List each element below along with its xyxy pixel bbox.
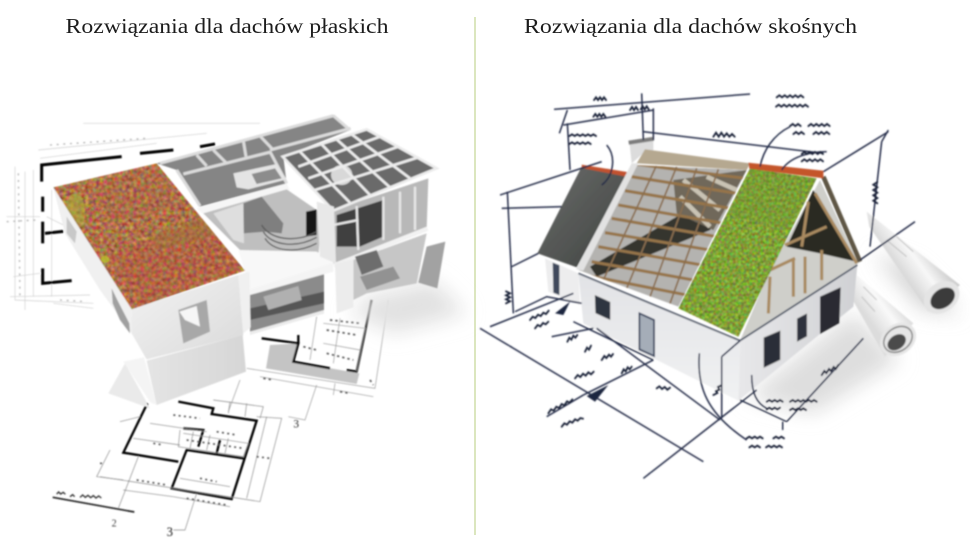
front door [639,313,654,356]
central column [317,202,336,263]
roof edge trim [576,163,638,271]
glass room dark interior [337,200,383,247]
left side openings upper [67,217,77,243]
garage dark details [355,250,383,275]
main front wall lower [147,335,246,405]
front window [594,294,611,321]
back blueprint roll [867,212,966,320]
lower storey interior [203,189,322,257]
front wall end strip [238,272,251,333]
wall top edges [578,265,857,341]
front roll end [873,316,923,363]
green grass roof [677,167,820,340]
floor of open room [238,250,335,291]
chimney cap [628,137,654,145]
lower storey slab edge [333,227,428,268]
main front wall upper [132,275,243,359]
window opening [178,300,210,343]
annex red ridge [582,165,627,177]
dimension arrow bottom [587,385,608,402]
interior dark panels [243,197,283,233]
plan title scribble [57,492,101,498]
glass room side frame [333,178,428,263]
gable edge tiles [823,177,860,262]
storage room inset [252,168,282,184]
dimension arrow left [555,302,570,315]
side door [820,287,841,334]
back roll body [867,212,960,312]
left side wall [53,187,132,333]
small annex wall [545,258,580,305]
attic pale trusses [680,177,737,227]
main front wall [578,273,740,401]
sketch lines [480,93,915,478]
main beam [197,183,290,214]
plan lower text marks [100,415,270,505]
front roll opening [884,331,909,354]
plan marker lower left: 2 [112,519,117,530]
plan lower walls [123,402,257,499]
floor shadow lower left [108,363,150,408]
rafters sloped [603,165,718,303]
plan shading [266,343,359,384]
plan lower room details [97,400,282,530]
back roll end [917,274,966,320]
attic view upper [673,170,747,230]
lattice roof base [283,129,437,211]
handwritten notes scribbles [506,95,877,447]
title: flat roofs: Rozwiązania dla dachów płaskich [66,14,389,38]
left side openings [112,288,130,333]
side window left [763,330,781,368]
lower wall side [123,357,157,405]
front roll marks [862,287,877,312]
upper storey walls [160,116,351,206]
side window middle [797,313,807,342]
plan upper walls [262,300,372,372]
sedum olive band [148,219,214,250]
ground shadow right of the house [747,313,900,413]
gable interior [740,180,858,341]
illustration: floor plans under the flat roof building [53,300,388,539]
sedum red patch [108,218,242,306]
grass texture [677,167,820,340]
front roll spiral [879,321,917,358]
rafter base [578,165,747,307]
plan marker bottom: 3 [167,525,173,539]
curved balcony rail [262,225,357,252]
garage interior [353,233,427,300]
divider between columns [474,17,476,535]
sedum yellow-green patch [65,193,85,230]
illustration: flat roof building with green sedum roof [7,115,467,408]
storage room block [233,164,287,189]
sofa [263,286,302,310]
grass darker band [730,172,810,228]
right red ridge [748,163,823,178]
gable dark attic [787,190,857,262]
lower column [335,259,353,313]
chimney [629,138,653,163]
sedum red patch upper [96,168,179,222]
lower room [250,272,324,332]
front roll body [853,275,913,357]
front blueprint roll [853,275,923,363]
plan behind building: dimension lines [7,123,260,310]
lower room dark floor [250,292,324,320]
sedum texture [50,160,250,313]
glass room vertical mullions [333,187,415,250]
garage end wall [418,242,445,288]
green sedum roof [50,160,250,313]
sedum yellow spot [101,256,109,263]
base slab [250,310,324,335]
attic view diagonal dark [590,216,712,277]
beige underlay at ridge [637,149,750,170]
back roll marks [887,237,913,257]
back roll opening [926,283,959,314]
title: pitched roofs: Rozwiązania dla dachów skośnych [524,14,857,38]
plan upper text marks [263,320,373,393]
interior pale curtain [213,203,244,243]
garage furniture [360,267,400,290]
annex door [553,263,559,295]
window sill highlight [179,306,200,327]
plan title bar [53,497,134,512]
gable timber frame [768,193,857,313]
floor shadow to the right [350,280,467,333]
illustration: pitched roof house with sketch lines [480,93,966,478]
interior dark door [306,209,317,237]
side wall [738,265,857,401]
plan behind building: black walls [42,144,215,283]
lattice roof bars [283,129,437,211]
slate annex roof [537,167,627,267]
plan marker upper: 3 [293,418,299,430]
rafter roof section [578,163,747,307]
floor slab [248,263,333,295]
plan behind building: text marks [7,138,147,302]
plan upper dimension lines [228,300,388,420]
ground shadow of back roll [873,253,960,313]
battens horizontal [585,163,745,295]
lattice highlight [331,165,352,185]
upper storey gray rooms [157,115,350,207]
